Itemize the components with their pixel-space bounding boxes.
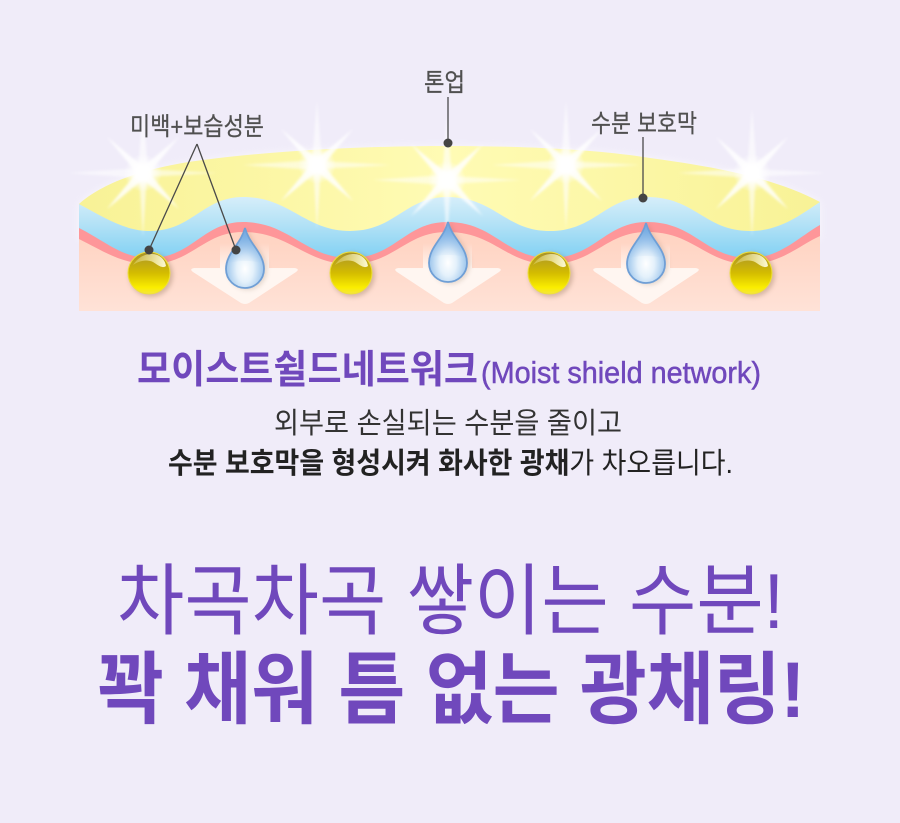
callout: 톤업 xyxy=(424,69,465,148)
icon: sparkle 3 xyxy=(373,116,521,244)
callout: 미백+보습성분: 미백+보습성분 xyxy=(130,113,264,141)
callout: 수분 보호막 xyxy=(591,110,697,202)
callout: 수분 보호막: 수분 보호막 xyxy=(591,110,697,138)
icon: sparkle 1 xyxy=(69,109,217,237)
headline: line 2: 꽉 채워 틈 없는 광채링! xyxy=(97,645,805,734)
icon: oil capsule 3 xyxy=(528,252,573,297)
blue moisture shield layer xyxy=(79,197,820,270)
icon: water drop 2 xyxy=(429,222,470,284)
icon: oil capsule 1 xyxy=(128,252,173,297)
headline: line 1: 차곡차곡 쌓이는 수분! xyxy=(117,557,784,645)
heading: moist shield network: 모이스트쉴드네트워크 xyxy=(137,349,478,392)
icon: sparkle 5 xyxy=(678,109,826,237)
yellow toner layer xyxy=(79,146,820,245)
icon: sparkle 2 xyxy=(243,101,391,229)
panel: skin layer diagram xyxy=(79,146,820,311)
heading: moist shield network xyxy=(137,349,761,392)
icon: water drop 3 xyxy=(627,223,668,285)
icon: oil capsule 4 xyxy=(730,252,775,297)
icon: downward arrow 1 xyxy=(191,243,298,304)
heading: moist shield network: (Moist shield network) xyxy=(481,355,761,390)
text block: description: 외부로 손실되는 수분을 줄이고 xyxy=(274,408,622,440)
icon: oil capsule 2 xyxy=(330,252,375,297)
callout: 톤업: 톤업 xyxy=(424,69,465,97)
pink skin line xyxy=(79,222,820,290)
icon: sparkle 4 xyxy=(492,101,640,229)
moisture glow behind layers xyxy=(79,146,820,240)
icon: water drop 1 xyxy=(226,228,267,290)
icon: downward arrow 2 xyxy=(395,243,501,304)
icon: downward arrow 3 xyxy=(593,243,699,304)
skin layer xyxy=(79,232,820,311)
callout: 미백+보습성분 xyxy=(130,113,264,254)
text block: description: 수분 보호막을 형성시켜 화사한 광채가 차오릅니다. xyxy=(168,447,733,480)
text block: description xyxy=(168,408,733,480)
